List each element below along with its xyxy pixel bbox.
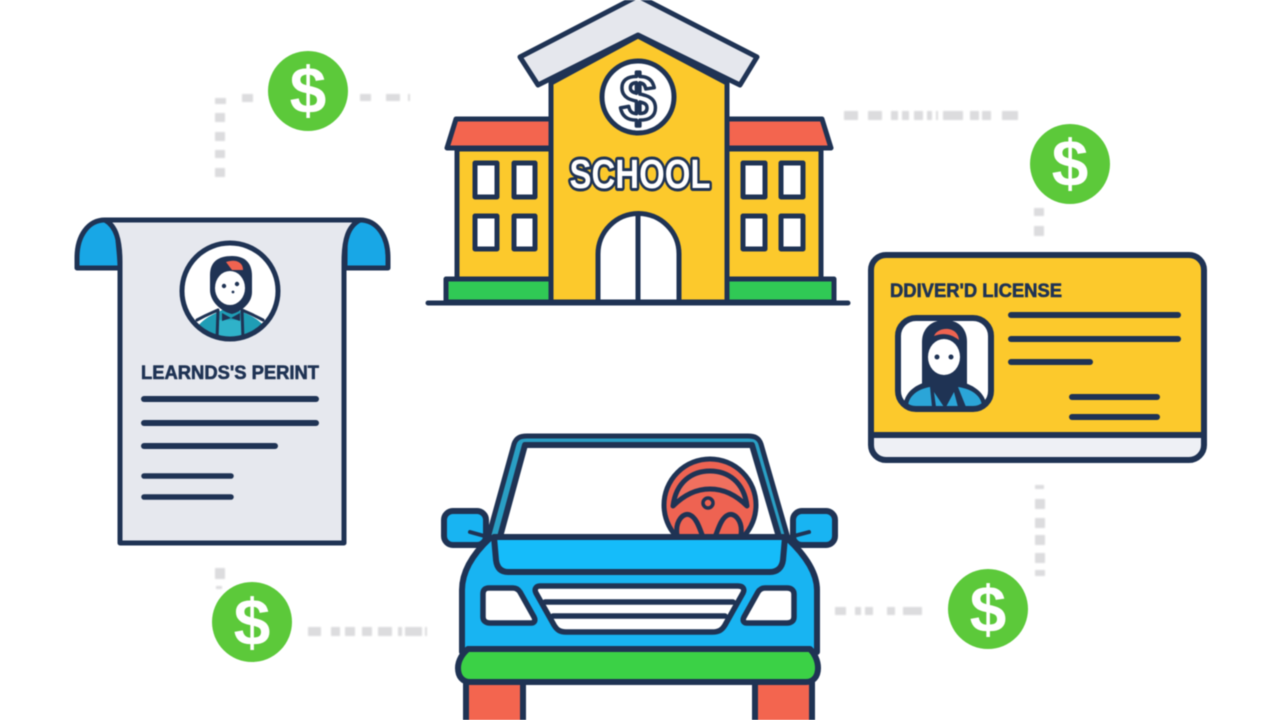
icon: school building: [428, 0, 848, 303]
door: [598, 214, 679, 302]
card bottom strip: [871, 435, 1204, 460]
panel: driver's license: [871, 255, 1204, 460]
left scroll curl: [77, 220, 120, 268]
school label: SCHOOL: [570, 151, 710, 197]
right wheel: [755, 680, 812, 720]
right headlight: [743, 588, 794, 623]
license text lines: [1011, 315, 1178, 417]
right green base: [726, 279, 834, 302]
icon: dollar coin bottom right: [948, 569, 1028, 649]
icon: dollar coin bottom right: $: [970, 572, 1006, 646]
hood panel: [494, 537, 785, 572]
main roof: [520, 0, 757, 85]
green bumper: [458, 649, 818, 682]
grille: [535, 586, 744, 632]
paper sheet: [105, 220, 360, 543]
avatar: [182, 243, 278, 342]
right mirror: [793, 511, 835, 545]
card outline: [871, 255, 1204, 460]
right scroll curl: [345, 220, 388, 268]
connector: top right dashes: [844, 111, 1044, 236]
cabin frame: [488, 436, 788, 538]
permit text lines: [144, 399, 316, 497]
icon: dollar coin top right: $: [1052, 126, 1088, 200]
icon: car front: [444, 436, 835, 720]
dollar medallion: $: [620, 61, 656, 135]
left wing windows: [475, 163, 535, 249]
connector: top left dashes: [215, 94, 410, 177]
left headlight: [483, 588, 535, 623]
right wing wall: [725, 149, 821, 280]
license heading: DDIVER'D LICENSE: [890, 281, 1062, 302]
icon: dollar coin bottom left: [212, 582, 292, 662]
permit heading: LEARNDS'S PERINT: [141, 363, 319, 384]
panel: learner's permit: [77, 220, 388, 543]
card body: [871, 255, 1204, 460]
left green base: [446, 279, 552, 302]
left mirror: [444, 511, 486, 545]
right wing windows: [743, 163, 803, 249]
left wing roof: [447, 119, 552, 148]
icon: dollar coin top left: [268, 51, 348, 131]
license photo: [898, 318, 991, 410]
left wheel: [466, 680, 523, 720]
windshield: [500, 445, 779, 537]
icon: dollar coin bottom left: $: [234, 585, 270, 659]
central tower: [551, 36, 727, 302]
mirror stalks: [470, 532, 809, 537]
car body: [462, 538, 817, 652]
right wing roof: [725, 119, 831, 148]
connector: bottom left dashes: [215, 568, 427, 636]
ground line: [428, 300, 848, 306]
icon: dollar coin top left: $: [290, 53, 326, 127]
icon: dollar coin top right: [1030, 124, 1110, 204]
steering wheel: [664, 459, 756, 551]
dollar medallion: [602, 61, 674, 135]
left wing wall: [457, 149, 553, 280]
connector: bottom right dashes: [835, 485, 1045, 615]
